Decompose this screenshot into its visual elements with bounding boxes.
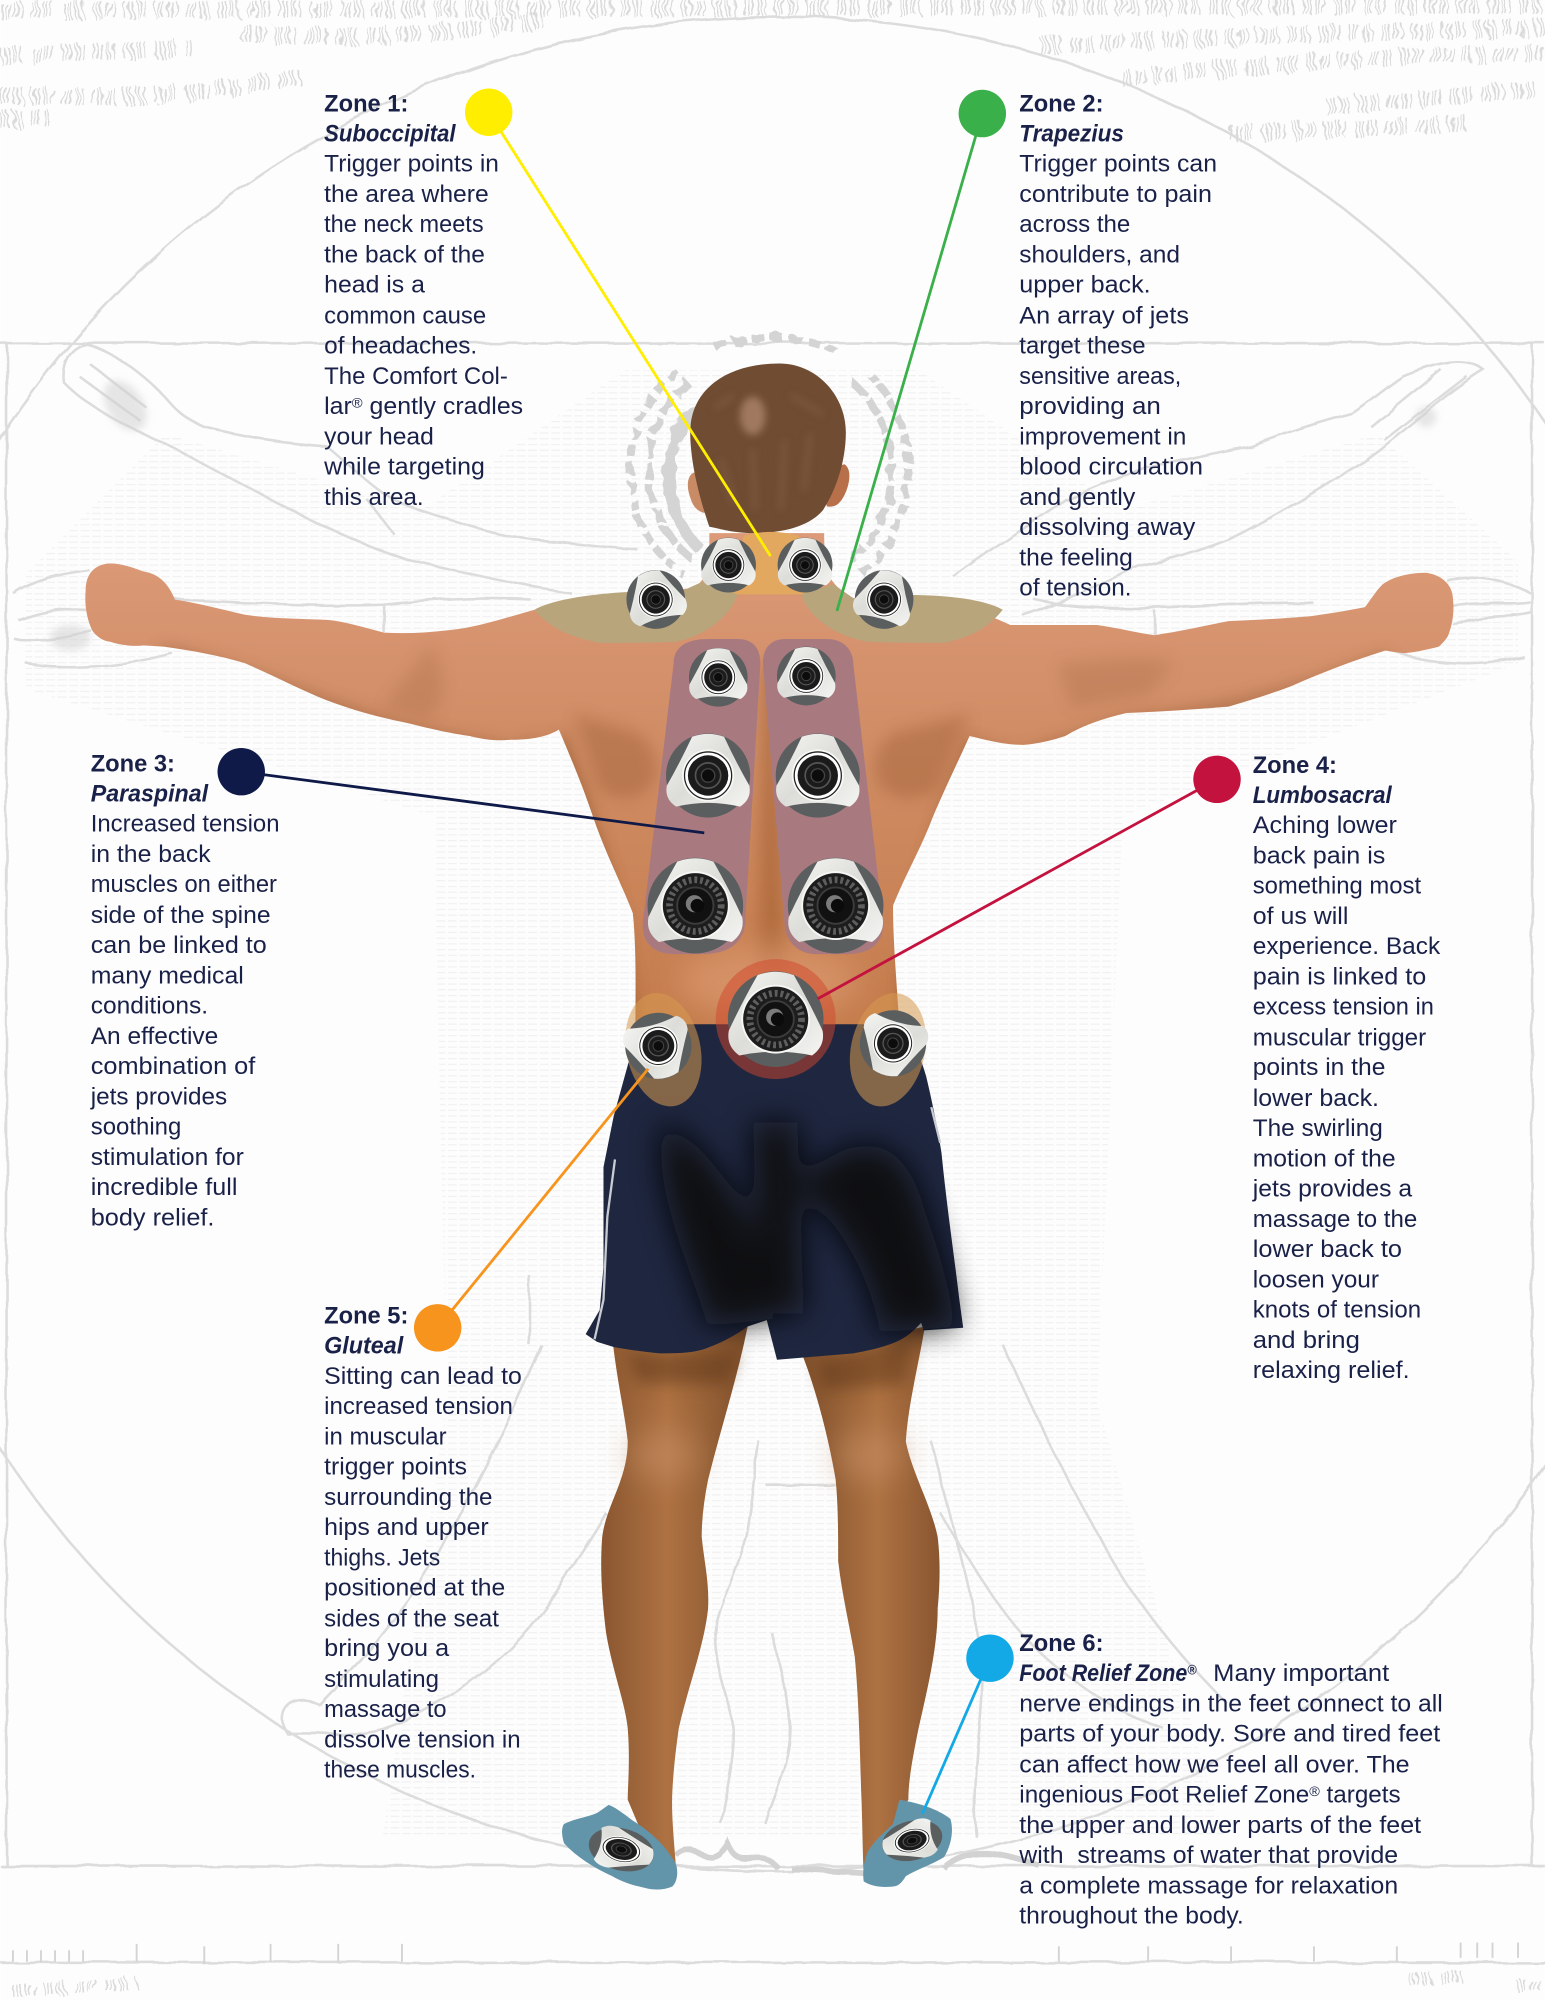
body: zone 6: Many important xyxy=(1213,1661,1390,1687)
body: zone 6: ® xyxy=(1187,1662,1197,1678)
body: zone 4: jets provides a xyxy=(1252,1176,1413,1202)
body: zone 3: can be linked to xyxy=(91,933,267,959)
body: zone 3: in the back xyxy=(91,842,211,868)
body: zone 1: ® xyxy=(352,395,363,411)
body: zone 4: and bring xyxy=(1253,1328,1360,1354)
heading: zone 1 xyxy=(324,92,456,148)
body: zone 4: pain is linked to xyxy=(1253,965,1426,991)
heading: zone 5: Gluteal xyxy=(324,1333,404,1359)
body: zone 6 xyxy=(1018,1661,1443,1929)
body: zone 2: dissolving away xyxy=(1019,515,1195,541)
marker: zone 6 blue dot xyxy=(966,1634,1014,1682)
body: zone 3: conditions. xyxy=(91,993,208,1019)
leader line: zone 2 xyxy=(837,114,982,611)
body: zone 5 xyxy=(324,1364,522,1783)
heading: zone 4 xyxy=(1253,753,1392,809)
body: zone 1: The Comfort Col- xyxy=(324,364,508,390)
body: zone 4: lower back to xyxy=(1253,1237,1402,1263)
heading: zone 5: Zone 5: xyxy=(324,1303,408,1329)
head xyxy=(688,364,849,533)
body: zone 3: body relief. xyxy=(91,1206,214,1232)
body: zone 5: massage to xyxy=(324,1697,447,1723)
body: zone 1 xyxy=(323,152,523,511)
body: zone 2: across the xyxy=(1019,212,1130,238)
jets xyxy=(584,538,947,1878)
marker: zone 4 red dot xyxy=(1193,756,1241,803)
body: zone 4 xyxy=(1252,813,1440,1384)
zone overlay: neck xyxy=(727,532,817,594)
heading: zone 5 xyxy=(324,1303,408,1359)
body: zone 3: Increased tension xyxy=(91,812,280,838)
body: zone 6: throughout the body. xyxy=(1019,1903,1244,1929)
marker: zone 2 green dot xyxy=(959,90,1006,137)
body: zone 6: parts of your body. Sore and tired feet xyxy=(1019,1722,1441,1748)
body: zone 6: a complete massage for relaxation xyxy=(1019,1873,1398,1899)
marker: zone 5 orange dot xyxy=(414,1304,461,1352)
text block: zone 5 xyxy=(324,1303,522,1783)
body: zone 5: in muscular xyxy=(324,1425,447,1451)
body: zone 4: loosen your xyxy=(1253,1268,1379,1294)
body: zone 4: motion of the xyxy=(1253,1146,1396,1172)
heading: zone 3: Paraspinal xyxy=(91,782,208,808)
text block: zone 2 xyxy=(1019,92,1217,602)
body: zone 5: trigger points xyxy=(324,1454,467,1480)
body: zone 3: stimulation for xyxy=(91,1145,244,1171)
body: zone 2: sensitive areas, xyxy=(1019,364,1181,390)
heading: zone 2: Zone 2: xyxy=(1019,92,1103,118)
body: zone 6: can affect how we feel all over. The xyxy=(1019,1752,1410,1778)
text block: zone 1 xyxy=(323,92,523,511)
body: zone 3: An effective xyxy=(91,1024,218,1050)
background sketch: ruler ticks xyxy=(13,1943,1518,1964)
text block: zone 4 xyxy=(1252,753,1440,1384)
body: zone 1: Trigger points in xyxy=(324,152,499,178)
leader line: zone 3 xyxy=(241,772,704,833)
legs xyxy=(601,1327,940,1875)
zone overlay: paraspinal xyxy=(643,639,883,954)
body: zone 6: the upper and lower parts of the feet xyxy=(1019,1813,1422,1839)
zone overlay: lumbosacral xyxy=(716,959,836,1079)
body: zone 1: while targeting xyxy=(323,454,485,480)
body: zone 4: lower back. xyxy=(1253,1086,1379,1112)
body: zone 5: hips and upper xyxy=(324,1515,489,1541)
body: zone 5: positioned at the xyxy=(324,1576,505,1602)
leader line: zone 1 xyxy=(489,112,771,556)
body: zone 3: muscles on either xyxy=(91,872,277,898)
body: zone 6: nerve endings in the feet connect to all xyxy=(1019,1692,1443,1718)
body: zone 2: contribute to pain xyxy=(1019,182,1212,208)
body: zone 4: experience. Back xyxy=(1253,934,1440,960)
body: zone 3: side of the spine xyxy=(91,903,271,929)
body: zone 5: thighs. Jets xyxy=(324,1546,440,1572)
body: zone 6: Foot Relief Zone xyxy=(1019,1661,1205,1687)
body: zone 4: excess tension in xyxy=(1253,995,1434,1021)
text block: zone 6 xyxy=(1018,1631,1443,1929)
body: zone 1: lar xyxy=(324,394,351,420)
body: zone 4: The swirling xyxy=(1253,1116,1383,1142)
body: zone 5: stimulating xyxy=(324,1667,439,1693)
body: zone 1: gently cradles xyxy=(363,394,523,420)
body: zone 2: of tension. xyxy=(1019,576,1132,602)
heading: zone 3: Zone 3: xyxy=(91,752,175,778)
heading: zone 2 xyxy=(1019,92,1124,148)
body: zone 4: Aching lower xyxy=(1253,813,1397,839)
body: zone 2: blood circulation xyxy=(1019,454,1203,480)
background sketch: curls around head xyxy=(631,338,908,574)
body: zone 3: combination of xyxy=(91,1054,256,1080)
background sketch: hatching xyxy=(26,370,1518,1837)
body: zone 5: sides of the seat xyxy=(324,1606,499,1632)
body: zone 2: the feeling xyxy=(1019,546,1133,572)
heading: zone 6: Zone 6: xyxy=(1019,1631,1103,1657)
body: zone 5: Sitting can lead to xyxy=(324,1364,522,1390)
body: zone 2: upper back. xyxy=(1019,273,1151,299)
body: zone 3: incredible full xyxy=(91,1175,237,1201)
body: zone 2 xyxy=(1019,152,1217,602)
body: zone 2: and gently xyxy=(1019,485,1136,511)
torso and arms xyxy=(85,533,1453,1028)
body: zone 4: something most xyxy=(1253,873,1422,899)
heading: zone 3 xyxy=(91,752,208,808)
leader line: zone 5 xyxy=(438,1069,648,1328)
marker: zone 3 navy dot xyxy=(218,748,265,795)
body: zone 4: of us will xyxy=(1253,904,1348,930)
text block: zone 3 xyxy=(90,752,280,1232)
leader line: zone 6 xyxy=(922,1658,990,1814)
body: zone 1: the neck meets xyxy=(324,212,484,238)
body: zone 4: massage to the xyxy=(1253,1207,1417,1233)
background sketch: hand shadows xyxy=(50,372,1436,651)
body: zone 1: head is a xyxy=(324,273,426,299)
body: zone 6: ® xyxy=(1309,1783,1320,1799)
body: zone 3 xyxy=(90,812,280,1232)
heading: zone 4: Lumbosacral xyxy=(1253,783,1392,809)
body: zone 4: relaxing relief. xyxy=(1253,1358,1410,1384)
zone overlay: trapezius xyxy=(535,580,1003,643)
body: zone 2: An array of jets xyxy=(1019,303,1189,329)
heading: zone 1: Suboccipital xyxy=(324,122,456,148)
body: zone 3: many medical xyxy=(91,963,244,989)
leader line: zone 4 xyxy=(818,779,1217,999)
foot relief zones xyxy=(562,1800,952,1890)
body: zone 4: knots of tension xyxy=(1253,1298,1421,1324)
body: zone 5: these muscles. xyxy=(324,1757,476,1783)
heading: zone 4: Zone 4: xyxy=(1253,753,1337,779)
body: zone 1: of headaches. xyxy=(324,333,477,359)
body: zone 5: dissolve tension in xyxy=(324,1727,521,1753)
marker: zone 1 yellow dot xyxy=(465,89,512,136)
body: zone 5: increased tension xyxy=(324,1394,513,1420)
body: zone 5: bring you a xyxy=(324,1636,450,1662)
body: zone 4: points in the xyxy=(1253,1055,1385,1081)
body: zone 1: the area where xyxy=(324,182,489,208)
body: zone 3: jets provides xyxy=(90,1085,227,1111)
body: zone 6: targets xyxy=(1320,1782,1401,1808)
body: zone 6: with streams of water that provide xyxy=(1018,1843,1398,1869)
body: zone 2: Trigger points can xyxy=(1019,152,1217,178)
body: zone 2: improvement in xyxy=(1019,425,1186,451)
body: zone 1: common cause xyxy=(324,303,486,329)
body: zone 2: providing an xyxy=(1019,394,1161,420)
figure: man from behind xyxy=(85,364,1453,1875)
heading: zone 1: Zone 1: xyxy=(324,92,408,118)
body: zone 2: shoulders, and xyxy=(1019,243,1180,269)
body: zone 4: muscular trigger xyxy=(1253,1025,1426,1051)
shorts xyxy=(586,1024,963,1360)
body: zone 5: surrounding the xyxy=(324,1485,493,1511)
body: zone 6: ingenious Foot Relief Zone xyxy=(1019,1782,1303,1808)
body: zone 1: your head xyxy=(324,425,434,451)
zone overlay: gluteal xyxy=(615,986,936,1114)
body: zone 3: soothing xyxy=(91,1115,181,1141)
body: zone 4: back pain is xyxy=(1253,844,1385,870)
body: zone 2: target these xyxy=(1019,333,1146,359)
body: zone 1: this area. xyxy=(324,485,424,511)
body: zone 1: the back of the xyxy=(324,243,485,269)
heading: zone 2: Trapezius xyxy=(1019,122,1124,148)
